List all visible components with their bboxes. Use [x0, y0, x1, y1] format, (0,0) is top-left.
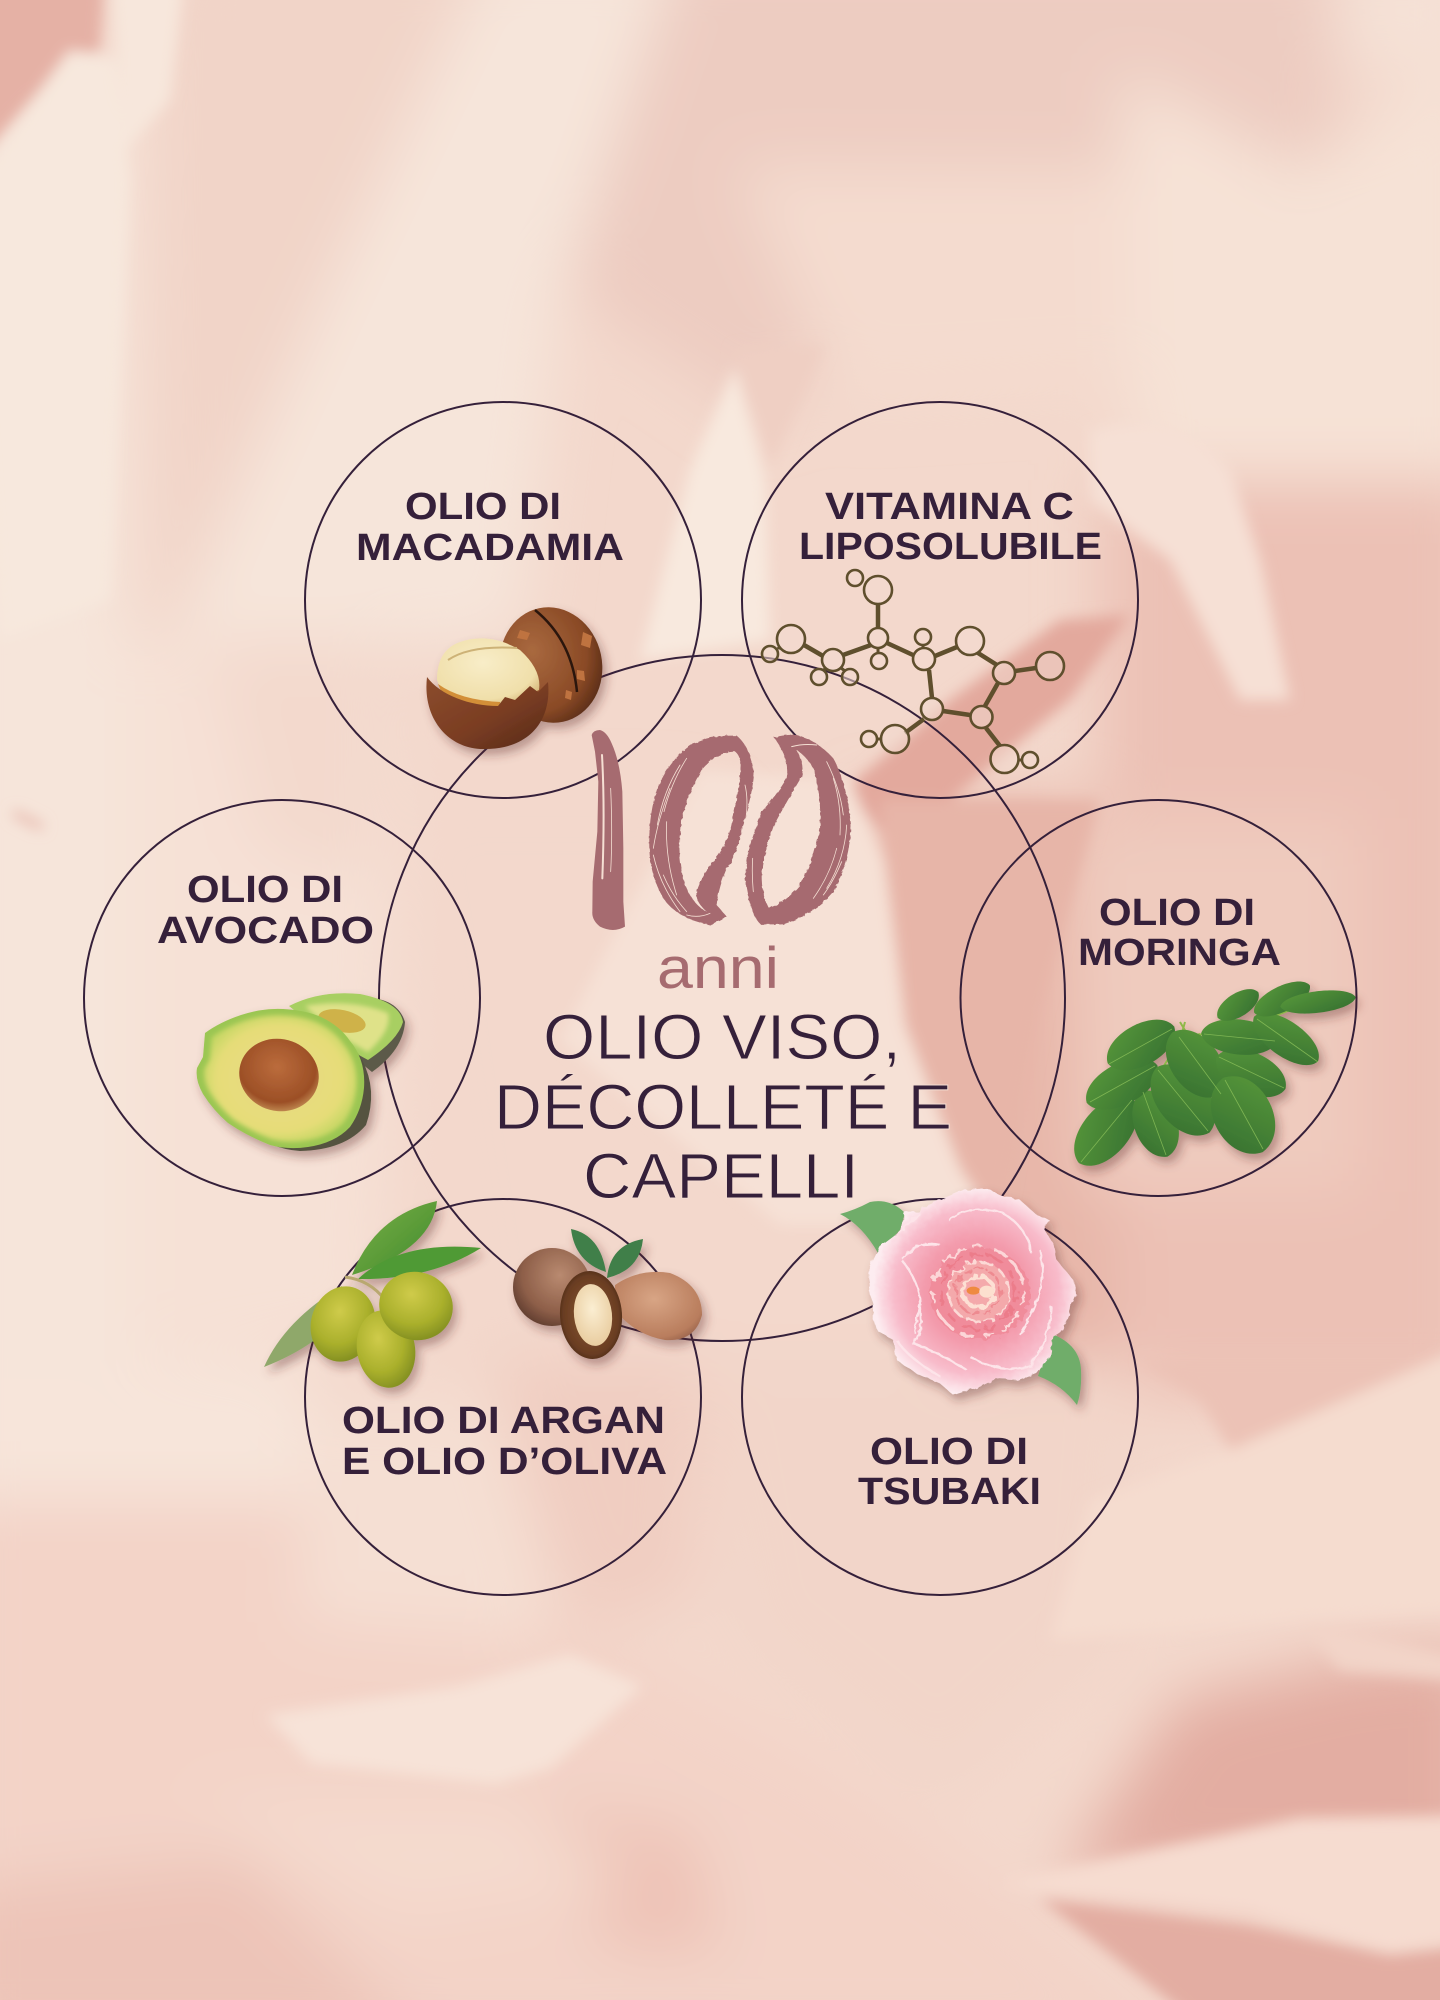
right nut — [615, 1272, 702, 1340]
brush streaks — [602, 744, 847, 916]
label: olio di macadamia — [356, 486, 624, 569]
label: olio di macadamia: OLIO DI — [405, 486, 561, 528]
icon: argan nuts — [513, 1229, 702, 1361]
title: olio viso, décolleté e capelli: DÉCOLLETÉ E — [494, 1071, 952, 1143]
inner ruffles — [930, 1247, 1030, 1339]
kernel — [571, 1282, 615, 1348]
skin — [250, 1014, 371, 1151]
label: olio di argan e olio d'oliva: OLIO DI ARGAN — [342, 1400, 665, 1442]
label: olio di tsubaki — [858, 1431, 1041, 1513]
icon: olive branch — [264, 1201, 481, 1392]
icon: avocado — [197, 993, 405, 1151]
label: olio di moringa: OLIO DI — [1099, 892, 1255, 934]
back half flesh — [289, 993, 403, 1060]
olive leaves — [352, 1201, 437, 1275]
kernel amber edge — [438, 684, 500, 708]
label: vitamina c liposolubile: VITAMINA C — [825, 486, 1074, 528]
label: olio di tsubaki: OLIO DI — [870, 1431, 1028, 1473]
kernel crease — [448, 648, 517, 660]
argan leaves — [571, 1229, 606, 1272]
icon: tsubaki flower — [840, 1188, 1081, 1405]
label: olio di macadamia: MACADAMIA — [356, 527, 624, 569]
title: olio viso, décolleté e capelli — [494, 1001, 952, 1212]
brush numeral 100 — [592, 730, 851, 930]
label: olio di tsubaki: TSUBAKI — [858, 1471, 1041, 1513]
shell cup — [426, 677, 548, 749]
label: olio di avocado: AVOCADO — [157, 910, 374, 952]
open shell — [557, 1269, 625, 1361]
twig — [345, 1277, 385, 1300]
molecule atoms — [762, 570, 1064, 773]
icon: macadamia nut — [426, 598, 613, 749]
small circles ring — [84, 402, 1356, 1595]
label: olio di avocado: OLIO DI — [187, 869, 343, 911]
back half skin — [340, 998, 405, 1072]
nut seam — [535, 610, 577, 692]
midribs — [1081, 1019, 1318, 1162]
first zero — [649, 736, 754, 925]
olives — [302, 1279, 384, 1369]
label: olio di moringa — [1078, 892, 1281, 974]
top leaf — [840, 1201, 905, 1253]
flower centre — [967, 1287, 980, 1295]
label: olio di argan e olio d'oliva — [342, 1400, 667, 1483]
petal edges — [897, 1210, 1052, 1377]
label: olio di moringa: MORINGA — [1078, 932, 1281, 974]
pit hollow — [316, 1005, 368, 1037]
stem — [1102, 1010, 1290, 1128]
title: olio viso, décolleté e capelli: CAPELLI — [583, 1140, 859, 1212]
second zero — [745, 735, 851, 924]
leaflets — [1061, 1084, 1151, 1178]
molecule bonds — [778, 604, 1036, 760]
green rim — [197, 1009, 364, 1148]
seed — [231, 1030, 327, 1120]
title: olio viso, décolleté e capelli: OLIO VISO, — [543, 1001, 901, 1073]
icon: moringa branch — [1061, 974, 1357, 1178]
outer petals — [868, 1188, 1076, 1395]
nut patches — [517, 630, 592, 700]
left nut — [513, 1248, 591, 1326]
large central circle — [379, 655, 1065, 1341]
digit 1 — [592, 730, 625, 930]
bottom leaf — [1038, 1334, 1081, 1405]
label: anni: anni — [657, 936, 779, 1001]
label: olio di avocado — [157, 869, 374, 952]
label: vitamina c liposolubile: LIPOSOLUBILE — [799, 526, 1102, 568]
yellow flesh — [204, 1015, 357, 1142]
label: olio di argan e olio d'oliva: E OLIO D’OLIVA — [342, 1441, 667, 1483]
label: vitamina c liposolubile — [799, 486, 1102, 568]
back nut — [489, 598, 613, 732]
icon: vitamin c molecule — [762, 570, 1064, 773]
kernel — [437, 638, 539, 708]
